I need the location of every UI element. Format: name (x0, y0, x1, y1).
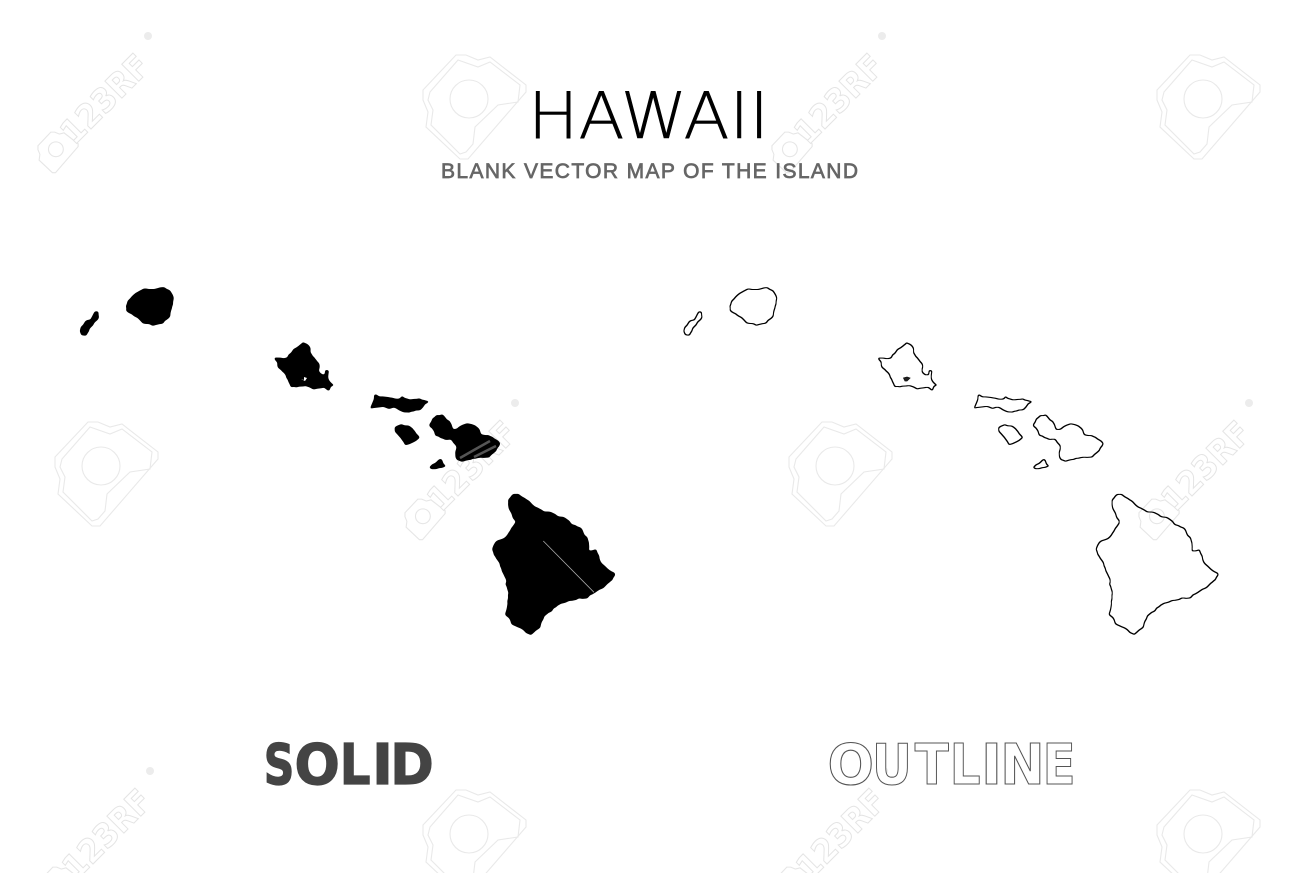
island: Kahoolawe (429, 458, 446, 470)
island outline: Kahoolawe (1032, 458, 1050, 470)
island: Kauai (125, 287, 174, 326)
label: OUTLINE: I (981, 733, 1002, 798)
label: SOLID: D (390, 733, 434, 798)
label: OUTLINE: E (1043, 733, 1076, 798)
label: SOLID (264, 733, 434, 798)
island: Big Island (492, 494, 616, 636)
label: OUTLINE: N (1000, 733, 1045, 798)
watermark: 123RF marks: 123RF (1153, 413, 1258, 519)
label: OUTLINE: T (915, 733, 949, 798)
watermark: 123RF marks: 123RF (786, 46, 891, 152)
island: Niihau (80, 312, 100, 336)
watermark: 123RF marks: 123RF (419, 413, 524, 519)
island: Lanai (394, 424, 419, 446)
island outline: Niihau (684, 312, 703, 336)
watermark: 123RF marks: 123RF (52, 46, 157, 152)
detail: harbor on Oahu (301, 377, 307, 381)
detail: line on Big Island (543, 541, 594, 592)
island outline: Big Island (1096, 494, 1220, 636)
label: OUTLINE (828, 733, 1076, 798)
label: SOLID: O (294, 733, 340, 798)
label: OUTLINE: O (828, 733, 874, 798)
label: SOLID: I (372, 733, 393, 798)
island: Maui (430, 414, 500, 462)
label: SOLID: L (340, 733, 370, 798)
island outline: Kauai (728, 287, 778, 326)
watermark over Maui (460, 441, 496, 458)
subtitle: BLANK VECTOR MAP OF THE ISLAND (441, 160, 858, 183)
island: Oahu (274, 342, 336, 391)
island: Molokai (370, 394, 429, 413)
island outline: Lanai (998, 424, 1022, 446)
outline map: harbor (904, 377, 910, 381)
map: solid islands (80, 287, 616, 636)
map: outline islands (684, 287, 1220, 636)
label: SOLID: S (264, 733, 294, 798)
island outline: Molokai (973, 394, 1032, 413)
island outline: Maui (1033, 414, 1104, 462)
label: OUTLINE: L (950, 733, 980, 798)
island outline: Oahu (878, 342, 940, 391)
title: HAWAII (528, 79, 769, 154)
label: OUTLINE: U (872, 733, 912, 798)
